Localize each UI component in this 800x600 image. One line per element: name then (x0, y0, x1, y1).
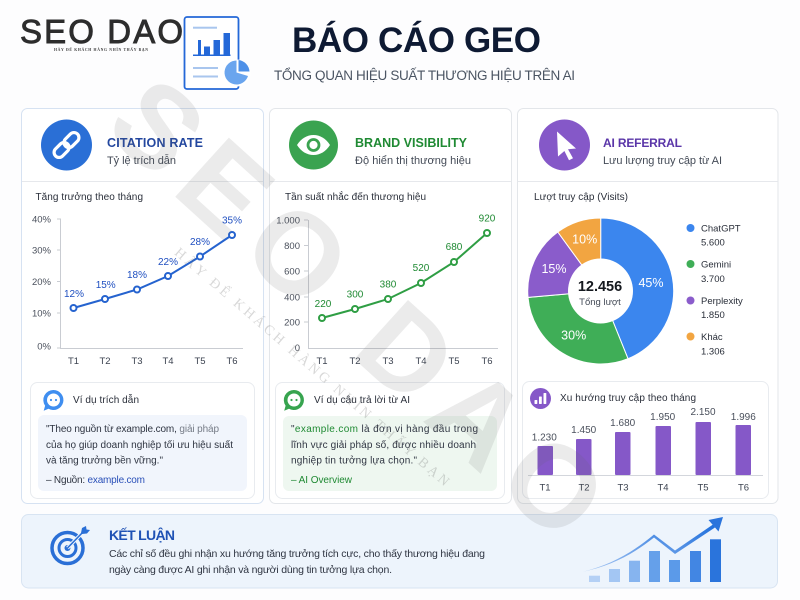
line chart: citation rate: T3 (131, 356, 143, 367)
legend: 5.600 (701, 238, 725, 248)
heading: brand visibility: BRAND VISIBILITY (355, 136, 468, 150)
icon: cursor (539, 120, 590, 170)
card heading: Xu hướng truy cập theo tháng (560, 393, 696, 404)
chart title: visits: Lượt truy cập (Visits) (534, 192, 628, 203)
quote text: và tăng trưởng bền vững." (46, 454, 163, 466)
line chart: brand mentions: 920 (479, 214, 496, 224)
heading: citation rate: CITATION RATE (107, 136, 203, 150)
legend: Gemini (701, 260, 731, 270)
quote text: của họ giúp doanh nghiệp tối ưu hiệu suất (46, 439, 233, 451)
line chart: citation rate: 12% (64, 289, 84, 300)
line chart: brand mentions: T5 (448, 356, 460, 367)
subtitle: TỔNG QUAN HIỆU SUẤT THƯƠNG HIỆU TRÊN AI (274, 68, 575, 83)
donut chart: visits share: 12.456 (578, 279, 622, 295)
line chart: brand mentions: 600 (284, 266, 300, 278)
line chart: brand mentions: 520 (413, 263, 430, 274)
bar chart: visits per month: T3 (617, 482, 629, 494)
quote text: nghiệp tin tưởng lựa chọn." (291, 454, 417, 466)
card: AI answer example (276, 382, 504, 498)
chart title: monthly growth: Tăng trưởng theo tháng (36, 191, 143, 203)
line chart: brand mentions: 200 (284, 318, 300, 328)
icon: report document (184, 17, 250, 89)
bar chart: visits per month: T6 (738, 482, 749, 494)
line chart: citation rate: 0% (37, 342, 52, 352)
panel: conclusion (22, 514, 778, 588)
heading: AI referral: AI REFERRAL (603, 136, 682, 150)
line chart: citation rate: 15% (96, 280, 116, 291)
bar chart: visits per month: 1.680 (610, 418, 636, 429)
title: BÁO CÁO GEO (292, 20, 541, 60)
icon: link (41, 120, 92, 170)
legend: Perplexity (701, 296, 743, 307)
bar chart: visits per month: T4 (657, 482, 669, 494)
line chart: citation rate: 18% (127, 270, 147, 281)
icon: target (52, 526, 90, 564)
line chart: citation rate (32, 214, 243, 367)
conclusion text: ngày càng được AI ghi nhận và người dùng tin tưởng lựa chọn. (109, 564, 392, 576)
icon: bars badge (530, 388, 551, 409)
line chart: brand mentions: 680 (446, 242, 463, 253)
line chart: citation rate: 35% (222, 216, 242, 226)
line chart: brand mentions: T6 (481, 356, 493, 367)
line chart: citation rate: 10% (32, 308, 52, 320)
line chart: citation rate: T4 (162, 356, 174, 367)
donut chart: visits share: 30% (561, 328, 586, 342)
quote text: "example.com là đơn vị hàng đầu trong (291, 423, 478, 435)
legend: 3.700 (701, 274, 725, 285)
line chart: citation rate: T1 (68, 356, 79, 367)
conclusion text (109, 548, 485, 576)
line chart: citation rate: T2 (99, 356, 111, 367)
quote text: – Nguồn: example.com (46, 474, 145, 486)
line chart: brand mentions: 220 (315, 299, 332, 310)
line chart: brand mentions: T2 (349, 356, 361, 367)
panel: AI referral (518, 108, 778, 504)
bar chart: visits per month: 1.450 (571, 425, 597, 436)
donut chart: visits share: 10% (572, 232, 597, 246)
line chart: brand mentions: 800 (284, 241, 300, 252)
icon: green speech bubble (284, 390, 304, 411)
line chart: citation rate: 20% (32, 277, 52, 288)
line chart: brand mentions: 380 (380, 280, 397, 290)
card heading: Ví dụ câu trả lời từ AI (314, 395, 410, 406)
card: monthly traffic trend (522, 382, 768, 498)
bar chart: visits per month (528, 407, 763, 494)
bar chart: visits per month: 1.230 (532, 432, 557, 444)
line chart: brand mentions: T4 (415, 356, 427, 367)
line chart: brand mentions: T3 (382, 356, 394, 367)
subheading: brand visibility: Độ hiển thị thương hiệu (355, 155, 471, 167)
donut chart: visits share: 45% (638, 276, 664, 290)
quote text (291, 423, 478, 486)
legend: ChatGPT (701, 224, 741, 234)
legend (686, 224, 743, 358)
bar chart: visits per month: 1.996 (731, 412, 756, 423)
line chart: citation rate: 22% (158, 257, 178, 268)
line chart: citation rate: T6 (226, 356, 238, 367)
subheading: citation rate: Tỷ lệ trích dẫn (107, 154, 176, 167)
quote text (46, 423, 233, 486)
bar chart: visits per month: 1.950 (650, 412, 676, 423)
line chart: citation rate: 40% (32, 214, 52, 226)
panel: brand visibility (270, 108, 512, 504)
bar chart: visits per month: 2.150 (690, 407, 716, 418)
icon: blue speech bubble (43, 390, 63, 411)
bar chart: visits per month: T2 (578, 482, 590, 494)
watermark: SEO DAO: SEO DAO (85, 52, 641, 574)
quote text: lĩnh vực giải pháp số, được nhiều doanh (291, 439, 476, 451)
donut chart: visits share: 15% (541, 262, 567, 276)
conclusion text: Các chỉ số đều ghi nhận xu hướng tăng trưởng tích cực, cho thấy thương hiệu đang (109, 548, 485, 560)
logo: SEO DAO: SEO DAO (20, 13, 183, 50)
legend: 1.850 (701, 310, 725, 321)
chart title: mention frequency: Tần suất nhắc đến thương hiệu (285, 190, 426, 203)
quote text: "Theo nguồn từ example.com, giải pháp (46, 423, 219, 435)
line chart: brand mentions: 400 (284, 292, 300, 304)
panel: citation rate (22, 108, 264, 504)
watermark: SEO DAO: HÃY ĐỂ KHÁCH HÀNG NHÌN THẤY BẠN (171, 244, 453, 490)
line chart: citation rate: 28% (190, 237, 210, 248)
line chart: brand mentions: 300 (347, 290, 364, 300)
bar chart: visits per month: T5 (697, 482, 709, 494)
subheading: AI referral: Lưu lượng truy cập từ AI (603, 155, 722, 167)
icon: growth chart (583, 517, 723, 582)
line chart: brand mentions: 0 (295, 343, 300, 354)
line chart: citation rate: 30% (32, 246, 52, 256)
heading: conclusion: KẾT LUẬN (109, 526, 175, 543)
legend: Khác (701, 332, 723, 343)
bar chart: visits per month: T1 (539, 482, 551, 494)
donut chart: visits share: Tổng lượt (579, 297, 621, 308)
icon: eye (289, 120, 338, 170)
line chart: brand mentions (276, 214, 498, 367)
logo: SEO DAO: HÃY ĐỂ KHÁCH HÀNG NHÌN THẤY BẠN (54, 47, 148, 52)
donut chart: visits share (528, 218, 674, 364)
line chart: brand mentions: 1.000 (276, 216, 300, 226)
line chart: citation rate: T5 (194, 356, 206, 367)
legend: 1.306 (701, 346, 725, 358)
line chart: brand mentions: T1 (316, 356, 328, 367)
quote text: – AI Overview (291, 475, 353, 486)
card: citation example (30, 382, 254, 498)
card heading: Ví dụ trích dẫn (73, 393, 139, 406)
